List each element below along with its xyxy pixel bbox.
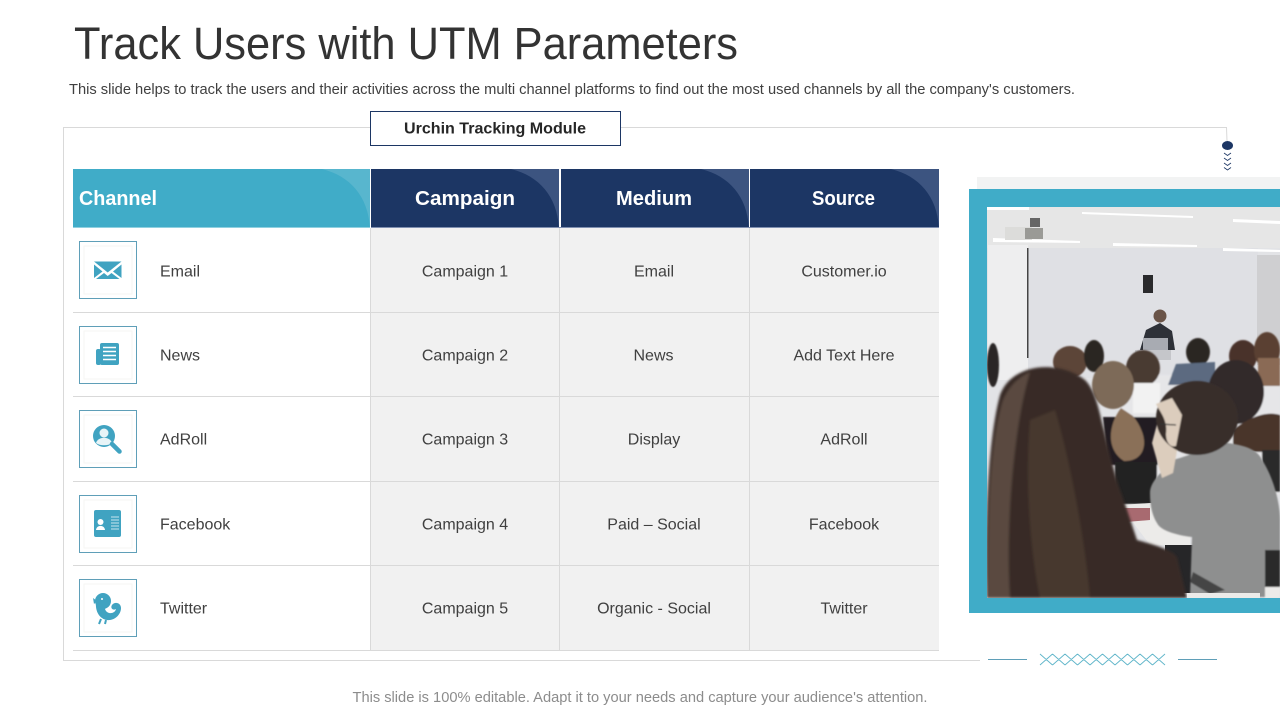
row: Facebook: Facebook xyxy=(160,516,231,534)
row: AdRoll xyxy=(80,410,868,468)
row: AdRoll: AdRoll xyxy=(160,432,207,448)
row: Facebook: Facebook xyxy=(809,516,880,534)
photo panel xyxy=(969,177,1280,613)
footer note: This slide is 100% editable. Adapt it to your needs and capture your audience's attention. xyxy=(352,690,928,706)
subtitle text: This slide helps to track the users and their activities across the multi channel platforms to find out the most used channels by all the company's customers. xyxy=(69,82,1075,98)
row: AdRoll: Campaign 3 xyxy=(422,432,508,448)
row: News: News xyxy=(633,348,674,364)
table header: Medium xyxy=(616,188,692,210)
row: AdRoll: AdRoll xyxy=(820,432,868,448)
row: Facebook xyxy=(80,496,880,552)
title: Track Users with UTM Parameters xyxy=(74,18,738,69)
panel outline xyxy=(64,128,1227,660)
photo: seminar audience xyxy=(986,207,1280,598)
icon: profile card xyxy=(80,496,136,552)
photo frame xyxy=(969,189,1280,613)
table xyxy=(73,169,939,650)
row: Facebook: Paid – Social xyxy=(607,516,701,534)
table grid lines xyxy=(73,228,939,650)
row: Twitter: Twitter xyxy=(160,600,208,618)
photo backing strip xyxy=(977,177,1280,189)
row: News: Add Text Here xyxy=(793,348,895,364)
ceiling and walls xyxy=(987,207,1280,248)
row: Twitter: Organic - Social xyxy=(597,600,711,618)
table body background xyxy=(371,228,939,650)
row: Twitter: Twitter xyxy=(820,600,868,618)
ponytail woman xyxy=(1103,417,1160,465)
module label box xyxy=(370,112,620,146)
row: Facebook: Campaign 4 xyxy=(422,516,508,534)
row: News: News xyxy=(160,348,200,364)
desk xyxy=(1120,502,1190,545)
row: Email: Email xyxy=(634,264,674,280)
front desk edge xyxy=(1187,593,1260,598)
table header: Campaign xyxy=(415,188,515,210)
table header: Channel xyxy=(79,188,157,210)
row: Email: Email xyxy=(160,264,200,280)
row: News: Campaign 2 xyxy=(422,348,508,364)
icon: timeline dot with chevrons xyxy=(1222,141,1233,170)
row: Email: Campaign 1 xyxy=(422,264,508,280)
icon: envelope xyxy=(80,242,136,298)
row: Email xyxy=(80,242,887,298)
table header xyxy=(73,169,939,228)
row: Twitter: Campaign 5 xyxy=(422,600,508,618)
row: News xyxy=(80,326,895,384)
table header: Source xyxy=(812,188,875,210)
module label box: Urchin Tracking Module xyxy=(404,120,586,138)
icon: bird xyxy=(80,580,136,636)
audience background xyxy=(987,332,1280,504)
icon: magnifier with person xyxy=(80,410,136,468)
row: AdRoll: Display xyxy=(628,432,680,448)
speaker xyxy=(1135,310,1175,360)
row: Email: Customer.io xyxy=(801,264,887,280)
woman in grey xyxy=(1150,381,1280,598)
row: Twitter xyxy=(80,580,868,636)
decorative connector with cross pattern xyxy=(988,654,1217,665)
woman with long hair xyxy=(986,367,1187,598)
icon: newspaper xyxy=(80,326,136,384)
